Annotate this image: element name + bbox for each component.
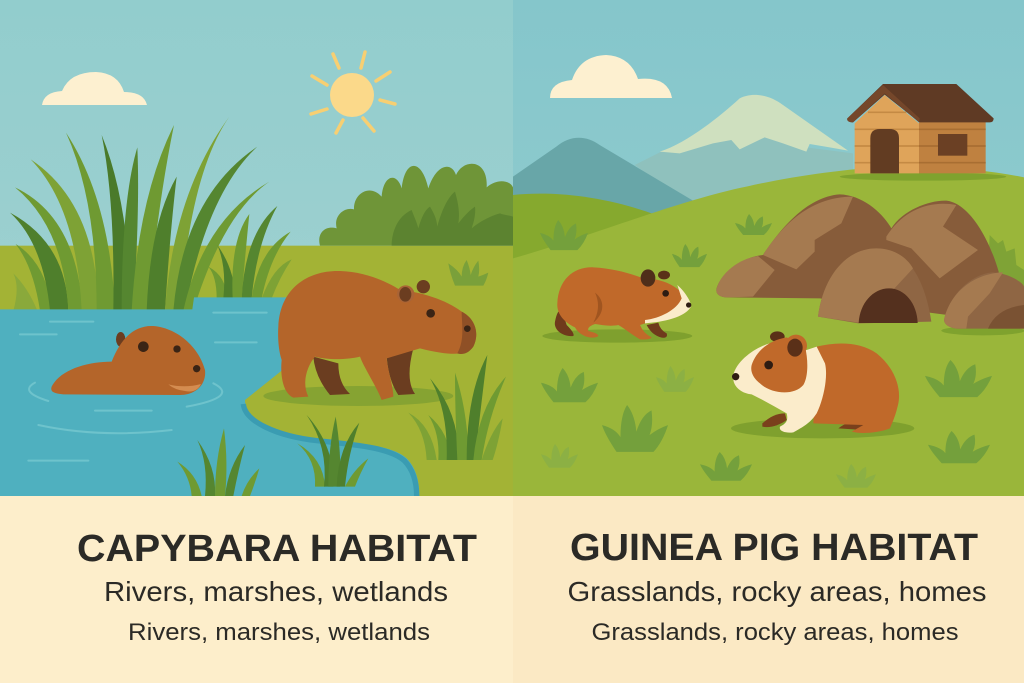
water ripples <box>20 313 267 461</box>
panel: guinea pig habitat scene <box>513 0 1024 497</box>
mountains <box>513 95 853 218</box>
plant behind rocks <box>988 235 1024 290</box>
water <box>0 297 419 496</box>
text: guinea pig habitat line 1: Grasslands, rocky areas, homes <box>568 576 986 607</box>
reeds front bottom <box>177 428 259 496</box>
shadow under capybara <box>263 386 453 406</box>
icon: wooden hutch <box>847 84 994 173</box>
reeds second cluster <box>208 206 292 298</box>
reeds front middle <box>297 415 368 487</box>
ground left <box>0 246 513 496</box>
grass tufts <box>540 214 992 488</box>
guinea pigs in 3x coordinates <box>542 267 914 438</box>
capybara standing <box>278 271 476 400</box>
text: capybara habitat line 2: Rivers, marshes, wetlands <box>128 619 430 646</box>
text: guinea pig habitat line 2: Grasslands, rocky areas, homes <box>592 619 958 646</box>
heading: capybara habitat: CAPYBARA HABITAT <box>77 528 477 570</box>
panel: capybara habitat scene <box>0 0 513 496</box>
icon: sun <box>311 52 395 133</box>
main hill <box>513 166 1024 497</box>
small guinea pig shadow <box>542 329 692 343</box>
cloud right <box>550 55 672 98</box>
bush <box>319 164 513 246</box>
capybara swimming <box>51 326 205 395</box>
heading: guinea pig habitat: GUINEA PIG HABITAT <box>570 527 978 569</box>
far hill <box>513 194 656 267</box>
reeds front right <box>408 355 506 460</box>
grass tuft <box>448 260 488 286</box>
panel: guinea pig caption <box>513 496 1024 683</box>
hutch shadow <box>840 173 1006 181</box>
detailed left scene in 3x coordinates <box>0 117 513 496</box>
detailed hill and rocks in 3x coordinates <box>513 84 1024 497</box>
rocks <box>716 194 1024 335</box>
cloud left <box>42 72 147 105</box>
large guinea pig shadow <box>731 418 914 438</box>
guinea pig large <box>732 331 899 433</box>
panel: capybara caption <box>0 496 513 683</box>
guinea pig small <box>555 267 691 339</box>
reeds main cluster <box>10 117 269 311</box>
text: capybara habitat line 1: Rivers, marshes, wetlands <box>104 576 448 607</box>
